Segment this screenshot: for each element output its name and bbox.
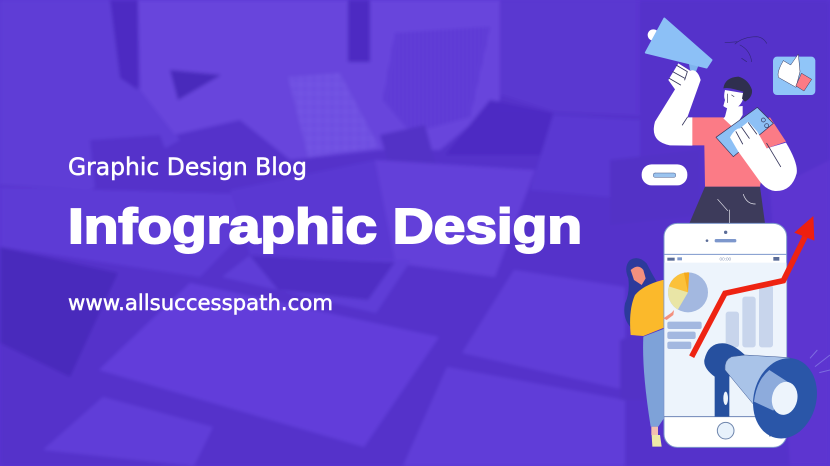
bar chart (726, 285, 773, 347)
phone screen (664, 263, 786, 417)
megaphone sound lines (810, 350, 830, 373)
list rows (667, 322, 702, 349)
illustration: phone with chart (624, 216, 830, 447)
handheld phone (716, 107, 773, 157)
home button (717, 422, 734, 439)
status bar and speaker: 00:00 (720, 257, 732, 262)
squiggle marks (725, 37, 767, 62)
woman presenter (624, 258, 667, 447)
phone body (664, 223, 787, 447)
toggle pill (642, 164, 687, 185)
raised arm and fist (654, 63, 701, 146)
subtitle: Graphic Design Blog (68, 153, 307, 181)
trousers (689, 187, 765, 223)
head and hair (723, 77, 752, 128)
icon: thumbs up card (773, 54, 815, 95)
big megaphone (704, 343, 825, 445)
title: Infographic Design (68, 200, 582, 254)
woman's pointing hand (663, 310, 674, 320)
status bar and speaker (664, 231, 787, 417)
red growth arrow (692, 216, 814, 357)
icon: small megaphone (646, 18, 712, 72)
website url: www.allsuccesspath.com (68, 291, 333, 315)
pie chart (667, 270, 708, 312)
holding arm (730, 122, 797, 191)
pink t-shirt (692, 117, 786, 187)
illustration: man with megaphone (642, 18, 815, 223)
